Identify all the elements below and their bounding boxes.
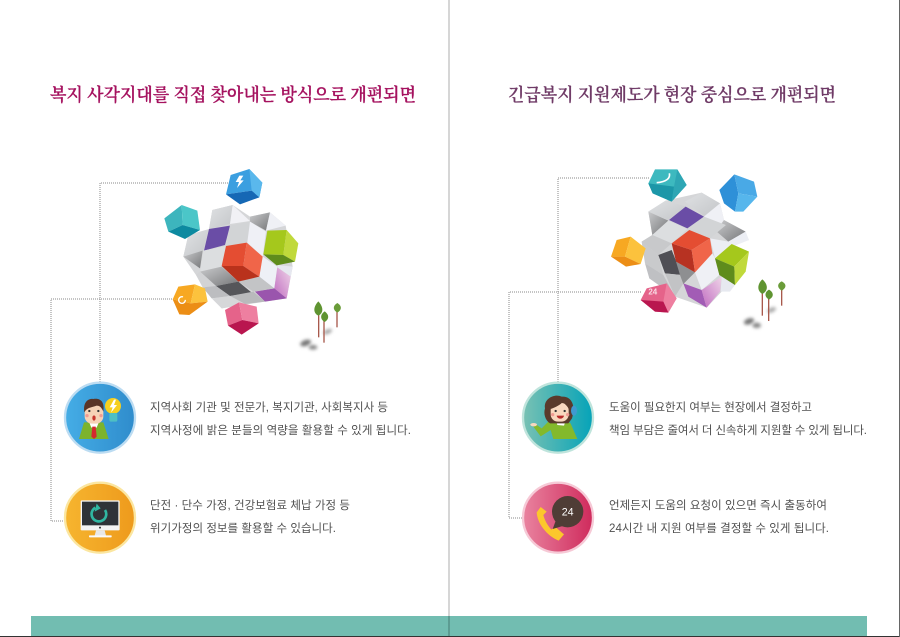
body and arm	[533, 420, 577, 439]
connector: right upper	[558, 178, 650, 382]
text block: right lower: 언제든지 도움의 요청이 있으면 즉시 출동하여	[609, 498, 827, 512]
text block: right upper	[609, 400, 867, 437]
body	[79, 422, 109, 439]
lightbulb	[105, 398, 121, 422]
headset	[571, 406, 577, 416]
teal cube	[164, 205, 200, 239]
title: right: 긴급복지 지원제도가 현장 중심으로 개편되면	[508, 84, 836, 105]
page frame: centre fold line	[448, 0, 450, 637]
pink cube with 24 label	[641, 283, 677, 313]
head	[84, 399, 104, 424]
text block: left lower: 위기가정의 정보를 활용할 수 있습니다.	[150, 521, 336, 535]
text block: left upper	[150, 401, 411, 437]
icon: monitor	[65, 483, 135, 553]
green cube	[263, 230, 298, 265]
text block: right lower: 24시간 내 지원 여부를 결정할 수 있게 됩니다.	[609, 521, 829, 535]
text block: right upper: 도움이 필요한지 여부는 현장에서 결정하고	[609, 400, 812, 414]
orange cube with refresh icon	[173, 284, 208, 315]
main cube	[183, 205, 293, 308]
blue cube	[719, 174, 757, 212]
pink cube with 24 label: 24	[648, 288, 658, 297]
icon: phone with 24 bubble	[523, 483, 593, 553]
text block: left upper: 지역사정에 밝은 분들의 역량을 활용할 수 있게 됩니다.	[150, 423, 411, 437]
text block: left lower: 단전 · 단수 가정, 건강보험료 체납 가정 등	[150, 499, 350, 512]
text block: left upper: 지역사회 기관 및 전문가, 복지기관, 사회복지사 등	[150, 401, 388, 414]
pink cube	[225, 302, 259, 335]
title: left: 복지 사각지대를 직접 찾아내는 방식으로 개편되면	[50, 84, 416, 105]
blue cube with lightning icon	[226, 169, 262, 204]
text block: right lower	[609, 498, 829, 535]
main cube	[642, 193, 749, 308]
icon: phone with 24 bubble: 24	[562, 506, 574, 518]
cube graphic: right	[611, 169, 785, 328]
cube graphic: left	[164, 169, 341, 350]
connector: left lower	[51, 299, 176, 521]
hair and face	[544, 396, 573, 423]
icon: man with lightbulb	[65, 383, 135, 453]
connector: right lower	[509, 292, 642, 518]
teal cube with phone icon	[648, 169, 687, 202]
green cube	[715, 244, 749, 285]
trees	[743, 279, 785, 328]
text block: left lower	[150, 499, 350, 535]
orange cube	[611, 237, 646, 267]
trees	[299, 301, 341, 350]
connector: left upper	[100, 183, 228, 382]
text block: right upper: 책임 부담은 줄여서 더 신속하게 지원할 수 있게 됩니다.	[609, 423, 867, 437]
icon: counsellor woman	[523, 383, 593, 453]
